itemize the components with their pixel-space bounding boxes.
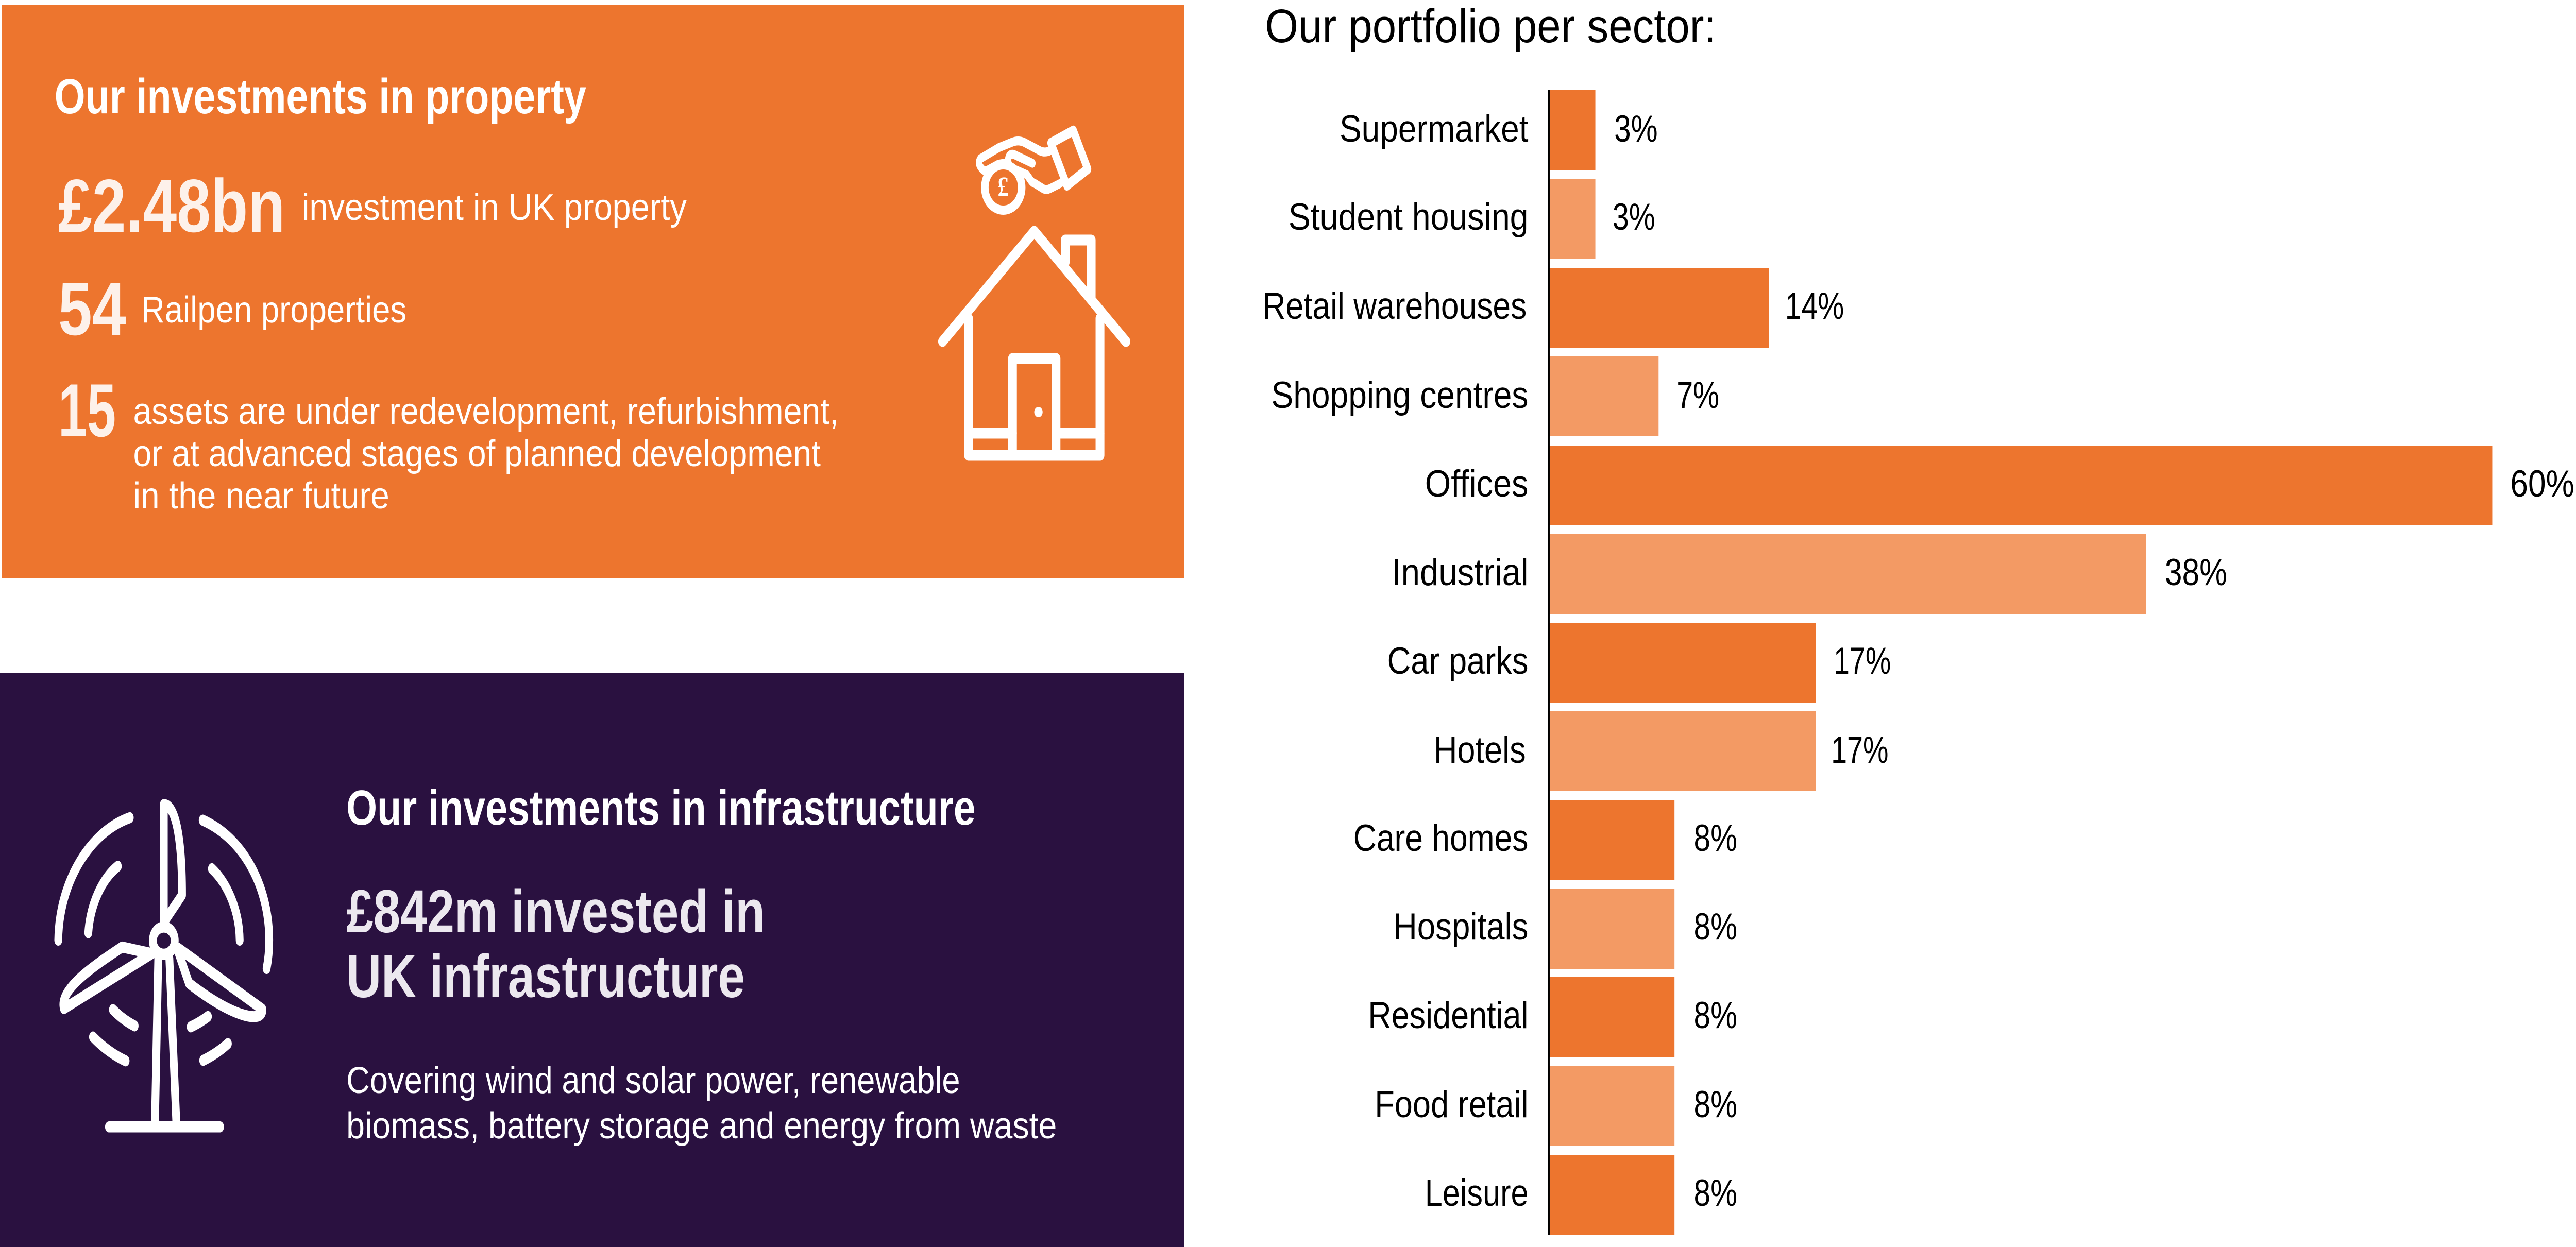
bar: Food retail 8%: 8%: [1694, 1084, 1737, 1125]
bar: Shopping centres 7%: Shopping centres: [1271, 374, 1529, 416]
stat: £842m invested: £842m invested in: [346, 878, 765, 945]
bar: Leisure 8%: 8%: [1694, 1172, 1737, 1214]
bar: Supermarket 3%: 3%: [1614, 108, 1658, 150]
bar: Leisure 8%: [1425, 1155, 1737, 1235]
stat: 15 assets: or at advanced stages of planned development: [133, 433, 821, 474]
bar: Offices 60%: Offices: [1425, 463, 1529, 505]
description: infrastructure coverage: biomass, battery storage and energy from waste: [346, 1105, 1057, 1146]
stat: £842m invested: [346, 878, 765, 1010]
stat: £842m invested: UK infrastructure: [346, 943, 745, 1010]
bar: Hotels 17%: 17%: [1831, 729, 1888, 771]
bar: Leisure 8%: Leisure: [1425, 1172, 1529, 1214]
stat: 15 assets: 15: [58, 369, 116, 453]
stat: £2.48bn investment: [58, 164, 687, 248]
panel background: orange: [2, 5, 1184, 578]
bar: Care homes 8%: 8%: [1694, 817, 1737, 859]
bar: Car parks 17%: [1387, 623, 1891, 703]
bar: Car parks 17%: Car parks: [1387, 640, 1529, 682]
bar: Hotels 17%: Hotels: [1434, 729, 1526, 771]
chart axis: [1548, 90, 1550, 1235]
panel: investments in infrastructure: [0, 673, 1184, 1247]
bar: Shopping centres 7%: 7%: [1676, 374, 1719, 416]
panel background: purple: [0, 673, 1184, 1247]
stat: 54 properties: 54: [58, 267, 126, 351]
bar: Offices 60%: 60%: [2510, 463, 2574, 505]
bar: Car parks 17%: 17%: [1834, 640, 1891, 682]
chart title: Our portfolio per sector:: [1265, 0, 1716, 53]
heading: property: Our investments in property: [55, 69, 586, 124]
stat: £2.48bn investment: investment in UK property: [302, 186, 687, 228]
bar: Student housing 3%: Student housing: [1289, 196, 1529, 238]
bar: Residential 8%: 8%: [1694, 995, 1737, 1036]
stat: 54 properties: [58, 267, 406, 351]
bar: Industrial 38%: [1392, 534, 2227, 614]
bar: Industrial 38%: Industrial: [1392, 552, 1529, 593]
stat: 15 assets: assets are under redevelopment, refurbishment,: [133, 390, 839, 432]
bar: Hotels 17%: [1434, 711, 1888, 791]
bar: Hospitals 8%: 8%: [1694, 906, 1737, 948]
bar: Retail warehouses 14%: 14%: [1785, 285, 1844, 327]
bar: Student housing 3%: [1289, 179, 1655, 259]
bar: Supermarket 3%: Supermarket: [1340, 108, 1529, 150]
bar: Residential 8%: [1368, 977, 1737, 1057]
bar: Student housing 3%: 3%: [1613, 196, 1655, 238]
icon: pound coin: £: [997, 171, 1009, 202]
heading: infrastructure: Our investments in infrastructure: [346, 780, 976, 835]
bar: Supermarket 3%: [1340, 90, 1658, 170]
stat: 54 properties: Railpen properties: [141, 289, 406, 330]
stat: 15 assets: [58, 369, 839, 516]
bar: Care homes 8%: Care homes: [1353, 817, 1529, 859]
bar: Care homes 8%: [1353, 800, 1737, 880]
icon: house with hand dropping pound coin: [942, 131, 1126, 455]
stat: 15 assets: in the near future: [133, 475, 389, 516]
description: infrastructure coverage: [346, 1060, 1057, 1146]
icon: house: [942, 231, 1126, 455]
icon: pound coin: [985, 165, 1022, 210]
bar chart: portfolio per sector: [1262, 90, 2574, 1235]
bar: Hospitals 8%: [1394, 889, 1737, 969]
description: infrastructure coverage: Covering wind and solar power, renewable: [346, 1060, 960, 1101]
bar: Shopping centres 7%: [1271, 356, 1719, 436]
icon: wind turbine: [58, 805, 269, 1127]
bar: Food retail 8%: Food retail: [1375, 1084, 1529, 1125]
bar: Offices 60%: [1425, 446, 2574, 525]
stat: £2.48bn investment: £2.48bn: [58, 164, 285, 248]
bar: Food retail 8%: [1375, 1066, 1737, 1146]
icon: hand: [979, 131, 1088, 190]
bar: Retail warehouses 14%: [1262, 268, 1844, 348]
bar: Retail warehouses 14%: Retail warehouses: [1262, 285, 1527, 327]
panel: investments in property: [2, 5, 1184, 578]
bar: Hospitals 8%: Hospitals: [1394, 906, 1529, 948]
bar: Industrial 38%: 38%: [2165, 552, 2227, 593]
bar: Residential 8%: Residential: [1368, 995, 1529, 1036]
